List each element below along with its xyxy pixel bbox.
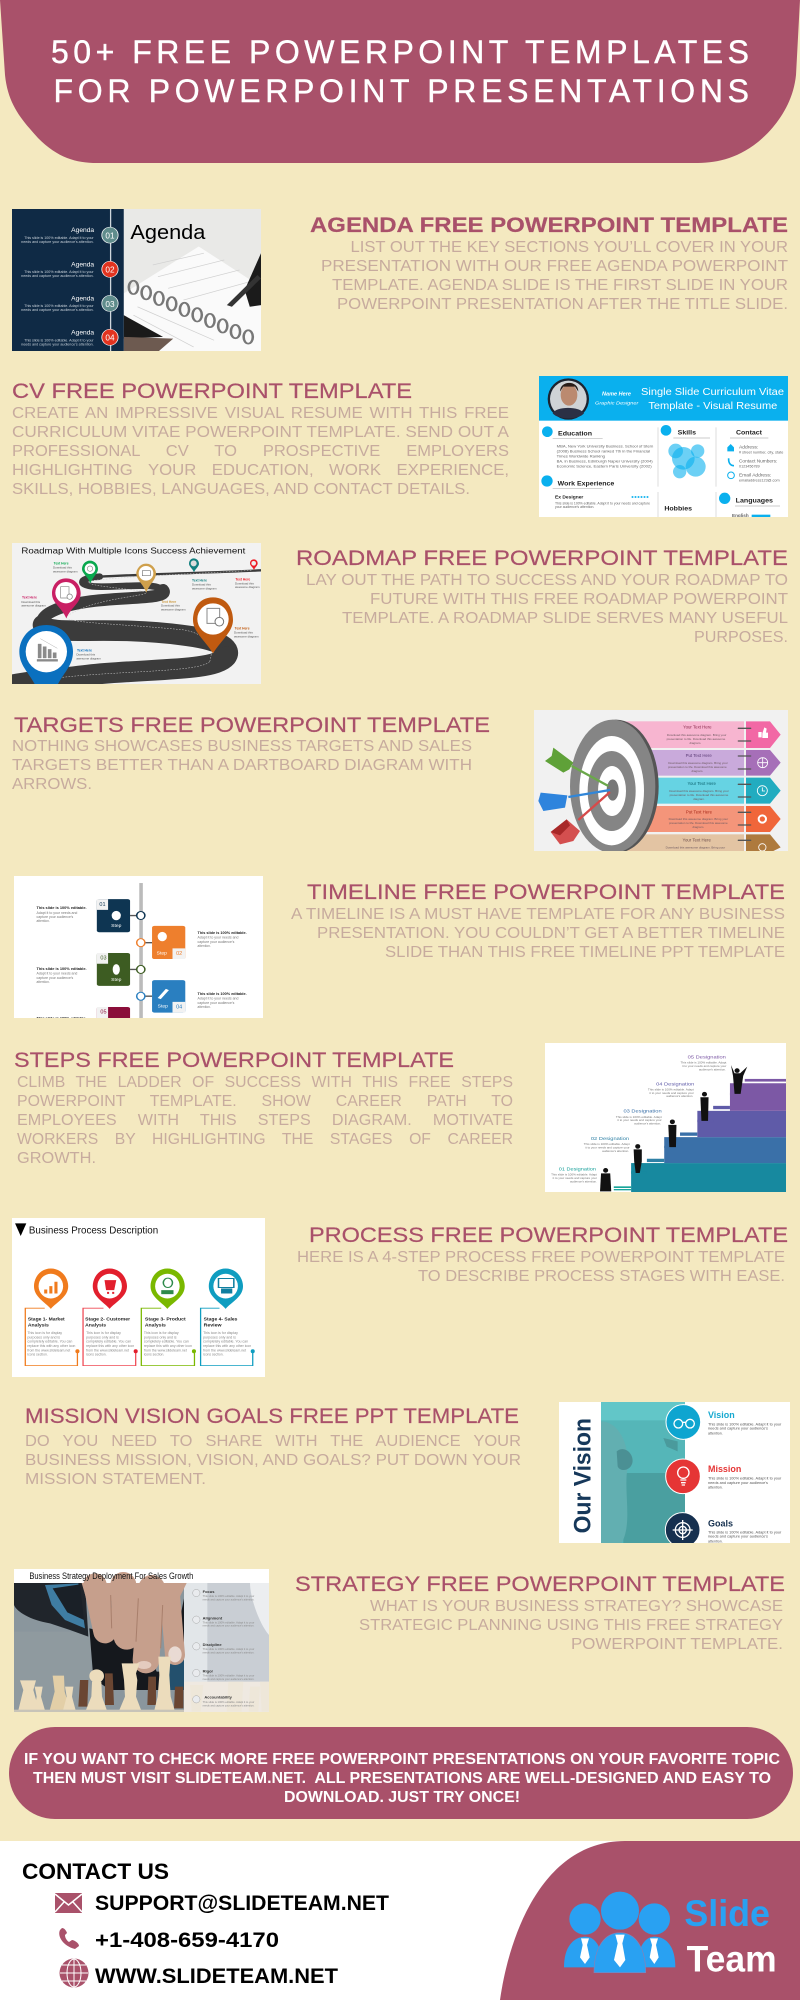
pin labels: awesome diagram [53, 569, 78, 573]
thumbnail: dartboard slide: diagram. [689, 741, 701, 745]
panel: roadmap template [11, 543, 789, 685]
text: process description: TO DESCRIBE PROCESS STAGES WITH EASE. [418, 1268, 785, 1285]
thumbnail: steps slide: This slide is 100% editable. Adapt [584, 1142, 630, 1146]
thumbnail: agenda slide: needs and capture your audience's attention. [21, 342, 94, 347]
thumbnail: timeline slide [14, 876, 263, 1021]
callout: visit slideteam [9, 1727, 793, 1819]
thumbnail: chess strategy slide: needs and capture your audience's attention. [203, 1677, 255, 1681]
panel: steps template [14, 1043, 786, 1192]
thumbnail: process slide: Review [204, 1323, 222, 1328]
thumbnail: agenda slide: This slide is 100% editable. Adapt it to your [24, 270, 94, 275]
text: agenda description: LIST OUT THE KEY SECTIONS YOU’LL COVER IN YOUR [350, 239, 788, 256]
thumbnail: cv slide: Single Slide Curriculum Vitae [641, 387, 784, 398]
pin labels: Download this [21, 600, 41, 604]
title banner: FOR POWERPOINT PRESENTATIONS [54, 73, 749, 109]
thumbnail: our vision slide: needs and capture your audience's [708, 1427, 768, 1431]
thumbnail: steps slide [545, 1043, 786, 1192]
logo: slide team [564, 1892, 777, 1980]
thumbnail: dartboard slide [534, 710, 788, 851]
thumbnail: our vision slide: Mission [708, 1464, 741, 1474]
pin labels: awesome diagram [161, 607, 186, 611]
thumbnail: timeline slide: This slide is 100% editable. [36, 906, 87, 911]
heading: targets: TARGETS FREE POWERPOINT TEMPLATE [14, 714, 490, 737]
thumbnail: cv slide: Contact Numbers: [739, 458, 777, 463]
text: cv description: SKILLS, HOBBIES, LANGUAGES, AND CONTACT DETAILS. [12, 481, 470, 498]
thumbnail: agenda slide: 01 [105, 231, 115, 241]
thumbnail: process slide: This icon is for display [144, 1331, 179, 1335]
thumbnail: our vision slide: attention. [708, 1485, 723, 1489]
thumbnail: our vision slide: Goals [708, 1518, 733, 1528]
thumbnail: agenda slide: needs and capture your audience's attention. [21, 308, 94, 313]
thumbnail: steps slide: 04 Designation [656, 1082, 695, 1087]
thumbnail: our vision slide: needs and capture your audience's [708, 1481, 768, 1485]
thumbnail: our vision slide: attention. [708, 1431, 723, 1435]
thumbnail: dartboard slide: diagram. [691, 769, 703, 773]
text: email: SUPPORT@SLIDETEAM.NET [95, 1892, 389, 1915]
thumbnail: chess strategy slide: Rigor [203, 1668, 214, 1673]
thumbnail: process slide: Stage 4- Sales [204, 1317, 238, 1322]
thumbnail: timeline slide: This slide is 100% editable. [36, 967, 87, 971]
pin labels: awesome diagram [234, 634, 259, 638]
panel: cv template [12, 376, 788, 518]
thumbnail: process slide: Stage 1- Market [28, 1317, 65, 1322]
thumbnail: chess strategy slide: needs and capture your audience's attention. [203, 1650, 255, 1654]
pin labels: awesome diagram [235, 585, 260, 589]
thumbnail: process slide: from the www.slideteam.net [86, 1348, 130, 1352]
thumbnail: cv slide: Times Worldwide Ranking [557, 454, 605, 458]
panel: strategy template [14, 1569, 785, 1712]
thumbnail: process slide: from the www.slideteam.net [203, 1348, 247, 1352]
thumbnail: dartboard slide: presentation to life. Download this awesome [670, 793, 729, 797]
pin labels: Text Here [235, 577, 250, 581]
thumbnail: chess strategy slide: needs and capture your audience's attention. [203, 1703, 255, 1707]
icon: phone [59, 1928, 79, 1949]
thumbnail: cv slide: Graphic Designer [595, 400, 639, 405]
heading: roadmap: ROADMAP FREE POWERPOINT TEMPLATE [296, 547, 788, 570]
thumbnail: steps slide: audience's attention. [634, 1121, 661, 1125]
thumbnail: our vision slide: This slide is 100% editable. Adapt it to your [708, 1530, 782, 1534]
thumbnail: dartboard slide: presentation to life. Download this awesome [667, 737, 726, 741]
thumbnail: steps slide: 03 Designation [623, 1109, 662, 1114]
thumbnail: steps slide: 05 Designation [688, 1054, 726, 1060]
thumbnail: chess strategy slide: Alignment [203, 1615, 223, 1620]
thumbnail: timeline slide: Step [158, 1005, 168, 1009]
thumbnail: dartboard slide: presentation to life. Download this awesome [669, 821, 728, 825]
thumbnail: process slide: purposes only and is [203, 1335, 236, 1339]
heading: timeline: TIMELINE FREE POWERPOINT TEMPLATE [307, 881, 785, 904]
text: cv description: PROFESSIONAL CV TO PROSPECTIVE EMPLOYERS [12, 443, 509, 460]
thumbnail: agenda slide: Agenda [130, 222, 206, 244]
text: strategy description: STRATEGIC PLANNING USING THIS FREE STRATEGY [359, 1617, 783, 1634]
thumbnail: process slide: purposes only and is [27, 1335, 60, 1339]
text: mission description: MISSION STATEMENT. [25, 1471, 206, 1488]
thumbnail: timeline slide: This slide is 100% editable. [36, 1016, 87, 1021]
pin labels: Download this [161, 604, 180, 608]
thumbnail: cv slide: Ex Designer [555, 495, 584, 500]
thumbnail: cv slide: Education [558, 431, 592, 438]
text: strategy description [359, 1598, 783, 1653]
text: steps description: CLIMB THE LADDER OF SUCCESS WITH THIS FREE STEPS [17, 1074, 513, 1091]
thumbnail: process slide: icons section. [27, 1353, 48, 1356]
text: steps description [17, 1074, 513, 1167]
thumbnail: process slide: purposes only and is [86, 1335, 119, 1339]
thumbnail: chess strategy slide: This slide is 100% editable. Adapt it to your [203, 1594, 254, 1598]
thumbnail: agenda slide: This slide is 100% editable. Adapt it to your [24, 338, 94, 343]
thumbnail: process slide: purposes only and is [144, 1335, 177, 1339]
text: roadmap description: TEMPLATE. A ROADMAP SLIDE SERVES MANY USEFUL [342, 610, 788, 627]
thumbnail: cv slide: # street number, city, state [739, 450, 783, 454]
pin labels: Download this [234, 631, 253, 635]
thumbnail: process slide: This icon is for display [27, 1331, 63, 1335]
thumbnail: process slide: Analysis [145, 1323, 166, 1328]
text: timeline description [291, 906, 785, 961]
thumbnail: our vision slide: needs and capture your audience's [708, 1535, 768, 1539]
panel: agenda template [12, 209, 789, 351]
text: cv description [12, 405, 510, 498]
thumbnail: dartboard slide: Download this awesome diagram. Bring your [666, 845, 725, 849]
thumbnail: process slide: Analysis [28, 1323, 49, 1328]
thumbnail: timeline slide: Adapt it to your needs and [36, 911, 78, 915]
heading: cv: CV FREE POWERPOINT TEMPLATE [12, 380, 412, 403]
thumbnail: process slide: icons section. [86, 1353, 107, 1356]
text: agenda description: PRESENTATION WITH OUR FREE AGENDA POWERPOINT [321, 258, 789, 275]
icon: globe [60, 1958, 88, 1988]
thumbnail: process slide: This icon is for display [203, 1331, 239, 1335]
thumbnail: cv slide: Email Address: [739, 472, 771, 477]
thumbnail: agenda slide: Agenda [71, 294, 94, 302]
text: steps description: EMPLOYEES WITH THIS STEPS DIAGRAM. MOTIVATE [17, 1112, 513, 1129]
thumbnail: timeline slide: 04 [176, 1004, 183, 1010]
text: cv description: CREATE AN IMPRESSIVE VISUAL RESUME WITH THIS FREE [12, 405, 509, 422]
thumbnail: cv slide: your audience's attention. [555, 505, 594, 509]
thumbnail: dartboard slide: Put Text Here [686, 753, 712, 758]
panel: targets template [12, 710, 788, 853]
pin labels: Download this [53, 566, 72, 570]
text: process description: HERE IS A 4-STEP PROCESS FREE POWERPOINT TEMPLATE [297, 1249, 785, 1266]
thumbnail: dartboard slide: diagram. [692, 825, 704, 829]
pin labels: awesome diagram [76, 656, 101, 660]
text: cv description: HIGHLIGHTING YOUR EDUCATION, WORK EXPERIENCE, [12, 462, 509, 479]
text: strategy description: POWERPOINT TEMPLATE. [571, 1636, 783, 1653]
thumbnail: steps slide: audience's attention. [602, 1149, 629, 1153]
thumbnail: process slide: icons section. [203, 1353, 224, 1356]
thumbnail: steps slide: This slide is 100% editable. Adapt [551, 1173, 598, 1176]
panel: timeline template [14, 876, 785, 1021]
callout: visit slideteam: THEN MUST VISIT SLIDETEAM.NET. ALL PRESENTATIONS ARE WELL-DESIGNED AND EASY TO [33, 1770, 771, 1787]
thumbnail: timeline slide: Adapt it to your needs and [198, 936, 239, 940]
panel: process template [12, 1218, 788, 1377]
thumbnail: agenda slide: 03 [105, 300, 115, 309]
thumbnail: cv slide: BA, in Business, Edinburgh Napier University (2004) [557, 459, 653, 463]
thumbnail: process slide: completely editable. You can [27, 1339, 73, 1343]
thumbnail: timeline slide: attention. [198, 944, 211, 949]
text: roadmap description: FUTURE WITH THIS FREE ROADMAP POWERPOINT [370, 591, 789, 608]
callout: visit slideteam: IF YOU WANT TO CHECK MORE FREE POWERPOINT PRESENTATIONS ON YOUR FAVORITE TOPIC [24, 1751, 780, 1768]
thumbnail: chess strategy slide: This slide is 100% editable. Adapt it to your [203, 1647, 254, 1651]
thumbnail: dartboard slide: Your Text Here [687, 781, 716, 786]
thumbnail: timeline slide: attention. [198, 1005, 211, 1010]
thumbnail: timeline slide: 02 [176, 951, 183, 957]
thumbnail: process slide: Analysis [85, 1323, 107, 1328]
thumbnail: cv slide: emailaddress123@.com [739, 478, 780, 482]
thumbnail: timeline slide: Step [157, 952, 167, 956]
text: timeline description: PRESENTATION. YOU COULDN’T GET A BETTER TIMELINE [317, 925, 785, 942]
text: steps description: WORKERS BY HIGHLIGHTING THE STAGES OF CAREER [17, 1131, 513, 1148]
pin labels: awesome diagram [192, 586, 217, 590]
thumbnail: dartboard slide: Download this awesome diagram. Bring your [668, 761, 728, 765]
thumbnail: steps slide: audience's attention. [666, 1094, 693, 1098]
thumbnail: dartboard slide: Put Text Here [686, 809, 713, 814]
thumbnail: timeline slide: 03 [100, 956, 107, 961]
thumbnail: chess strategy slide: This slide is 100% editable. Adapt it to your [203, 1674, 254, 1678]
heading: steps: STEPS FREE POWERPOINT TEMPLATE [14, 1049, 454, 1072]
thumbnail: dartboard slide: presentation to life. Download this awesome [668, 765, 727, 769]
thumbnail: agenda slide: 02 [105, 266, 115, 275]
thumbnail: steps slide: audience's attention. [699, 1067, 726, 1071]
thumbnail: timeline slide: Adapt it to your needs and [198, 996, 239, 1001]
thumbnail: timeline slide: Step [111, 978, 121, 982]
pin labels: Text Here [161, 600, 176, 604]
thumbnail: chess strategy slide: This slide is 100% editable. Adapt it to your [203, 1620, 254, 1624]
footer: contact and logo [0, 1841, 800, 2000]
thumbnail: process slide: replace this with any other icon [27, 1344, 76, 1348]
thumbnail: dartboard slide: Your Text Here [683, 725, 712, 730]
thumbnail: steps slide: it to your needs and capture your [553, 1176, 598, 1180]
text: phone: +1-408-659-4170 [95, 1929, 279, 1952]
pin labels [21, 562, 260, 660]
thumbnail: steps slide: This slide is 100% editable. Adapt [616, 1115, 662, 1119]
thumbnail: steps slide: it to your needs and capture your [682, 1064, 727, 1068]
thumbnail: process slide: from the www.slideteam.net [27, 1348, 71, 1352]
pin labels: Text Here [77, 649, 92, 653]
thumbnail: agenda slide: Agenda [71, 226, 94, 234]
thumbnail: cv slide: 0123456789 [739, 464, 760, 468]
text: roadmap description [306, 572, 789, 646]
thumbnail: chess strategy slide: Business Strategy Deployment For Sales Growth [29, 1571, 193, 1581]
thumbnail: cv slide [539, 376, 788, 518]
thumbnail: process slide: Business Process Description [29, 1224, 158, 1236]
text: steps description: POWERPOINT TEMPLATE. SHOW CAREER PATH TO [17, 1093, 513, 1110]
thumbnail: dartboard slide: Download this awesome diagram. Bring your [667, 733, 726, 737]
thumbnail: agenda slide: 04 [105, 334, 115, 343]
text: mission description: DO YOU NEED TO SHARE WITH THE AUDIENCE YOUR [25, 1433, 521, 1450]
thumbnail: steps slide: it to your needs and capture your [585, 1145, 630, 1149]
thumbnail: process slide: Stage 2- Customer [85, 1317, 131, 1322]
thumbnail: process slide: This icon is for display [86, 1331, 122, 1335]
text: roadmap description: PURPOSES. [694, 629, 788, 646]
thumbnail: process slide: Stage 3- Product [145, 1317, 186, 1322]
thumbnail: agenda slide [12, 209, 261, 351]
text: agenda description: POWERPOINT PRESENTATION AFTER THE TITLE SLIDE. [337, 296, 788, 313]
text: mission description [25, 1433, 521, 1488]
thumbnail: chess strategy slide: needs and capture your audience's attention. [203, 1624, 255, 1628]
text: steps description: GROWTH. [17, 1150, 96, 1167]
thumbnail: process slide: from the www.slideteam.net [144, 1348, 187, 1352]
pins [19, 558, 258, 684]
thumbnail: our vision slide: Vision [708, 1410, 735, 1420]
thumbnail: cv slide: (2008) Business School ranked 7th in the Financial [557, 449, 650, 453]
text: cv description: CURRICULUM VITAE POWERPOINT TEMPLATE. SEND OUT A [12, 424, 510, 441]
text: targets description: TARGETS BETTER THAN A DARTBOARD DIAGRAM WITH [12, 757, 472, 774]
thumbnail: cv slide: Skills [678, 429, 696, 436]
text: timeline description: A TIMELINE IS A MUST HAVE TEMPLATE FOR ANY BUSINESS [291, 906, 785, 923]
text: strategy description: WHAT IS YOUR BUSINESS STRATEGY? SHOWCASE [370, 1598, 783, 1615]
pin labels: Text Here [54, 562, 69, 566]
callout: visit slideteam: DOWNLOAD. JUST TRY ONCE! [284, 1789, 520, 1806]
panel: mission vision goals template [25, 1402, 790, 1547]
thumbnail: cv slide: Template - Visual Resume [648, 401, 778, 412]
thumbnail: timeline slide: capture your audience's [198, 940, 235, 945]
thumbnail: our vision slide [559, 1402, 790, 1543]
thumbnail: cv slide: Languages [736, 498, 773, 505]
heading: mission: MISSION VISION GOALS FREE PPT TEMPLATE [25, 1405, 519, 1428]
text: targets description [12, 738, 472, 793]
thumbnail: dartboard slide: Your Text Here [682, 837, 711, 842]
pin labels: Text Here [192, 579, 207, 583]
thumbnail: agenda slide: This slide is 100% editable. Adapt it to your [24, 236, 94, 240]
text: timeline description: SLIDE THAN THIS FREE TIMELINE PPT TEMPLATE [385, 944, 785, 961]
text: website: WWW.SLIDETEAM.NET [95, 1965, 338, 1988]
thumbnail: timeline slide: capture your audience's [198, 1001, 235, 1005]
text: agenda description: TEMPLATE. AGENDA SLIDE IS THE FIRST SLIDE IN YOUR [332, 277, 788, 294]
thumbnail: roadmap slide [12, 543, 261, 684]
thumbnail: timeline slide: capture your audience's [36, 915, 74, 919]
thumbnail: cv slide: Work Experience [558, 480, 615, 487]
text: roadmap description: LAY OUT THE PATH TO SUCCESS AND YOUR ROADMAP TO [306, 572, 788, 589]
title banner: 50+ FREE POWERPOINT TEMPLATES [51, 34, 749, 70]
thumbnail: timeline slide: attention. [36, 919, 50, 924]
thumbnail: agenda slide: needs and capture your audience's attention. [21, 274, 94, 279]
thumbnail: chess strategy slide: needs and capture your audience's attention. [203, 1597, 255, 1601]
pin labels: Text Here [235, 627, 250, 631]
icon: mail [55, 1893, 82, 1913]
pin labels: awesome diagram [21, 604, 46, 608]
thumbnail: timeline slide: attention. [36, 980, 50, 984]
thumbnail: timeline slide: 01 [99, 902, 106, 908]
thumbnail: cv slide: English [732, 513, 749, 518]
thumbnail: cv slide: Economic Science, Eastern Paris University (2002) [557, 464, 652, 468]
pin labels: Download this [76, 653, 96, 657]
thumbnail: timeline slide: 05 [100, 1010, 107, 1015]
thumbnail: our vision slide: This slide is 100% editable. Adapt it to your [708, 1422, 782, 1426]
thumbnail: steps slide: 01 Designation [559, 1167, 596, 1172]
pin labels: Download this [192, 583, 211, 587]
thumbnail: chess strategy slide: Discipline [203, 1642, 222, 1647]
pin labels: Text Here [22, 596, 37, 600]
thumbnail: cv slide: MBA, New York University Business. School of Stern [557, 445, 653, 449]
text: mission description: BUSINESS MISSION, VISION, AND GOALS? PUT DOWN YOUR [25, 1452, 521, 1469]
thumbnail: chess strategy slide [14, 1569, 269, 1712]
thumbnail: process slide: completely editable. You can [86, 1339, 132, 1343]
thumbnail: our vision slide: This slide is 100% editable. Adapt it to your [708, 1476, 782, 1480]
thumbnail: agenda slide: Agenda [71, 260, 94, 268]
thumbnail: cv slide: Address: [739, 444, 758, 449]
thumbnail: steps slide: 02 Designation [591, 1136, 629, 1141]
thumbnail: agenda slide: Agenda [71, 328, 94, 336]
thumbnail: agenda slide: This slide is 100% editable. Adapt it to your [24, 304, 94, 309]
title banner [0, 0, 800, 163]
thumbnail: cv slide: Name Here [602, 392, 631, 398]
heading: process: PROCESS FREE POWERPOINT TEMPLATE [309, 1224, 788, 1247]
thumbnail: cv slide: Contact [736, 430, 763, 437]
thumbnail: steps slide: audience's attention. [570, 1179, 597, 1183]
thumbnail: dartboard slide: Download this awesome diagram. Bring your [669, 817, 728, 821]
thumbnail: cv slide: Hobbies [664, 505, 692, 512]
heading: contact us: CONTACT US [22, 1859, 169, 1884]
thumbnail: process slide: icons section. [144, 1353, 164, 1356]
thumbnail: steps slide: This slide is 100% editable. Adapt [648, 1087, 695, 1091]
thumbnail: timeline slide: Adapt it to your needs and [36, 971, 78, 976]
thumbnail: process slide: replace this with any other icon [144, 1344, 192, 1348]
pin labels: Download this [235, 581, 254, 585]
thumbnail: chess strategy slide: Focus [203, 1589, 215, 1594]
text: agenda description [321, 239, 789, 313]
thumbnail: process slide: completely editable. You can [144, 1339, 189, 1343]
thumbnail: steps slide: it to your needs and capture your [649, 1091, 694, 1095]
thumbnail: timeline slide: Step [111, 924, 121, 929]
thumbnail: cv slide: This slide is 100% editable. Adapt it to your needs and capture [555, 501, 650, 505]
thumbnail: dartboard slide: Download this awesome diagram. Bring your [669, 789, 729, 793]
thumbnail: chess strategy slide: Accountability [204, 1695, 233, 1700]
thumbnail: steps slide: This slide is 100% editable. Adapt [681, 1061, 727, 1064]
thumbnail: our vision slide: Our Vision [570, 1418, 597, 1533]
logo: slide team: Slide [684, 1892, 770, 1934]
heading: strategy: STRATEGY FREE POWERPOINT TEMPLATE [295, 1573, 785, 1596]
thumbnail: timeline slide: capture your audience's [36, 976, 74, 980]
text: targets description: ARROWS. [12, 776, 92, 793]
text: targets description: NOTHING SHOWCASES BUSINESS TARGETS AND SALES [12, 738, 472, 755]
thumbnail: our vision slide: attention. [708, 1539, 723, 1543]
heading: agenda: AGENDA FREE POWERPOINT TEMPLATE [310, 214, 788, 237]
thumbnail: dartboard slide: diagram. [693, 797, 705, 801]
thumbnail: steps slide: it to your needs and capture your [617, 1118, 662, 1122]
thumbnail: roadmap slide: Roadmap With Multiple Icons Success Achievement [21, 546, 246, 556]
thumbnail: agenda slide: needs and capture your audience's attention. [21, 240, 94, 244]
thumbnail: process slide [12, 1218, 265, 1377]
text: process description [297, 1249, 785, 1285]
thumbnail: chess strategy slide: This slide is 100% editable. Adapt it to your [203, 1700, 254, 1704]
thumbnail: process slide: replace this with any other icon [86, 1344, 135, 1348]
